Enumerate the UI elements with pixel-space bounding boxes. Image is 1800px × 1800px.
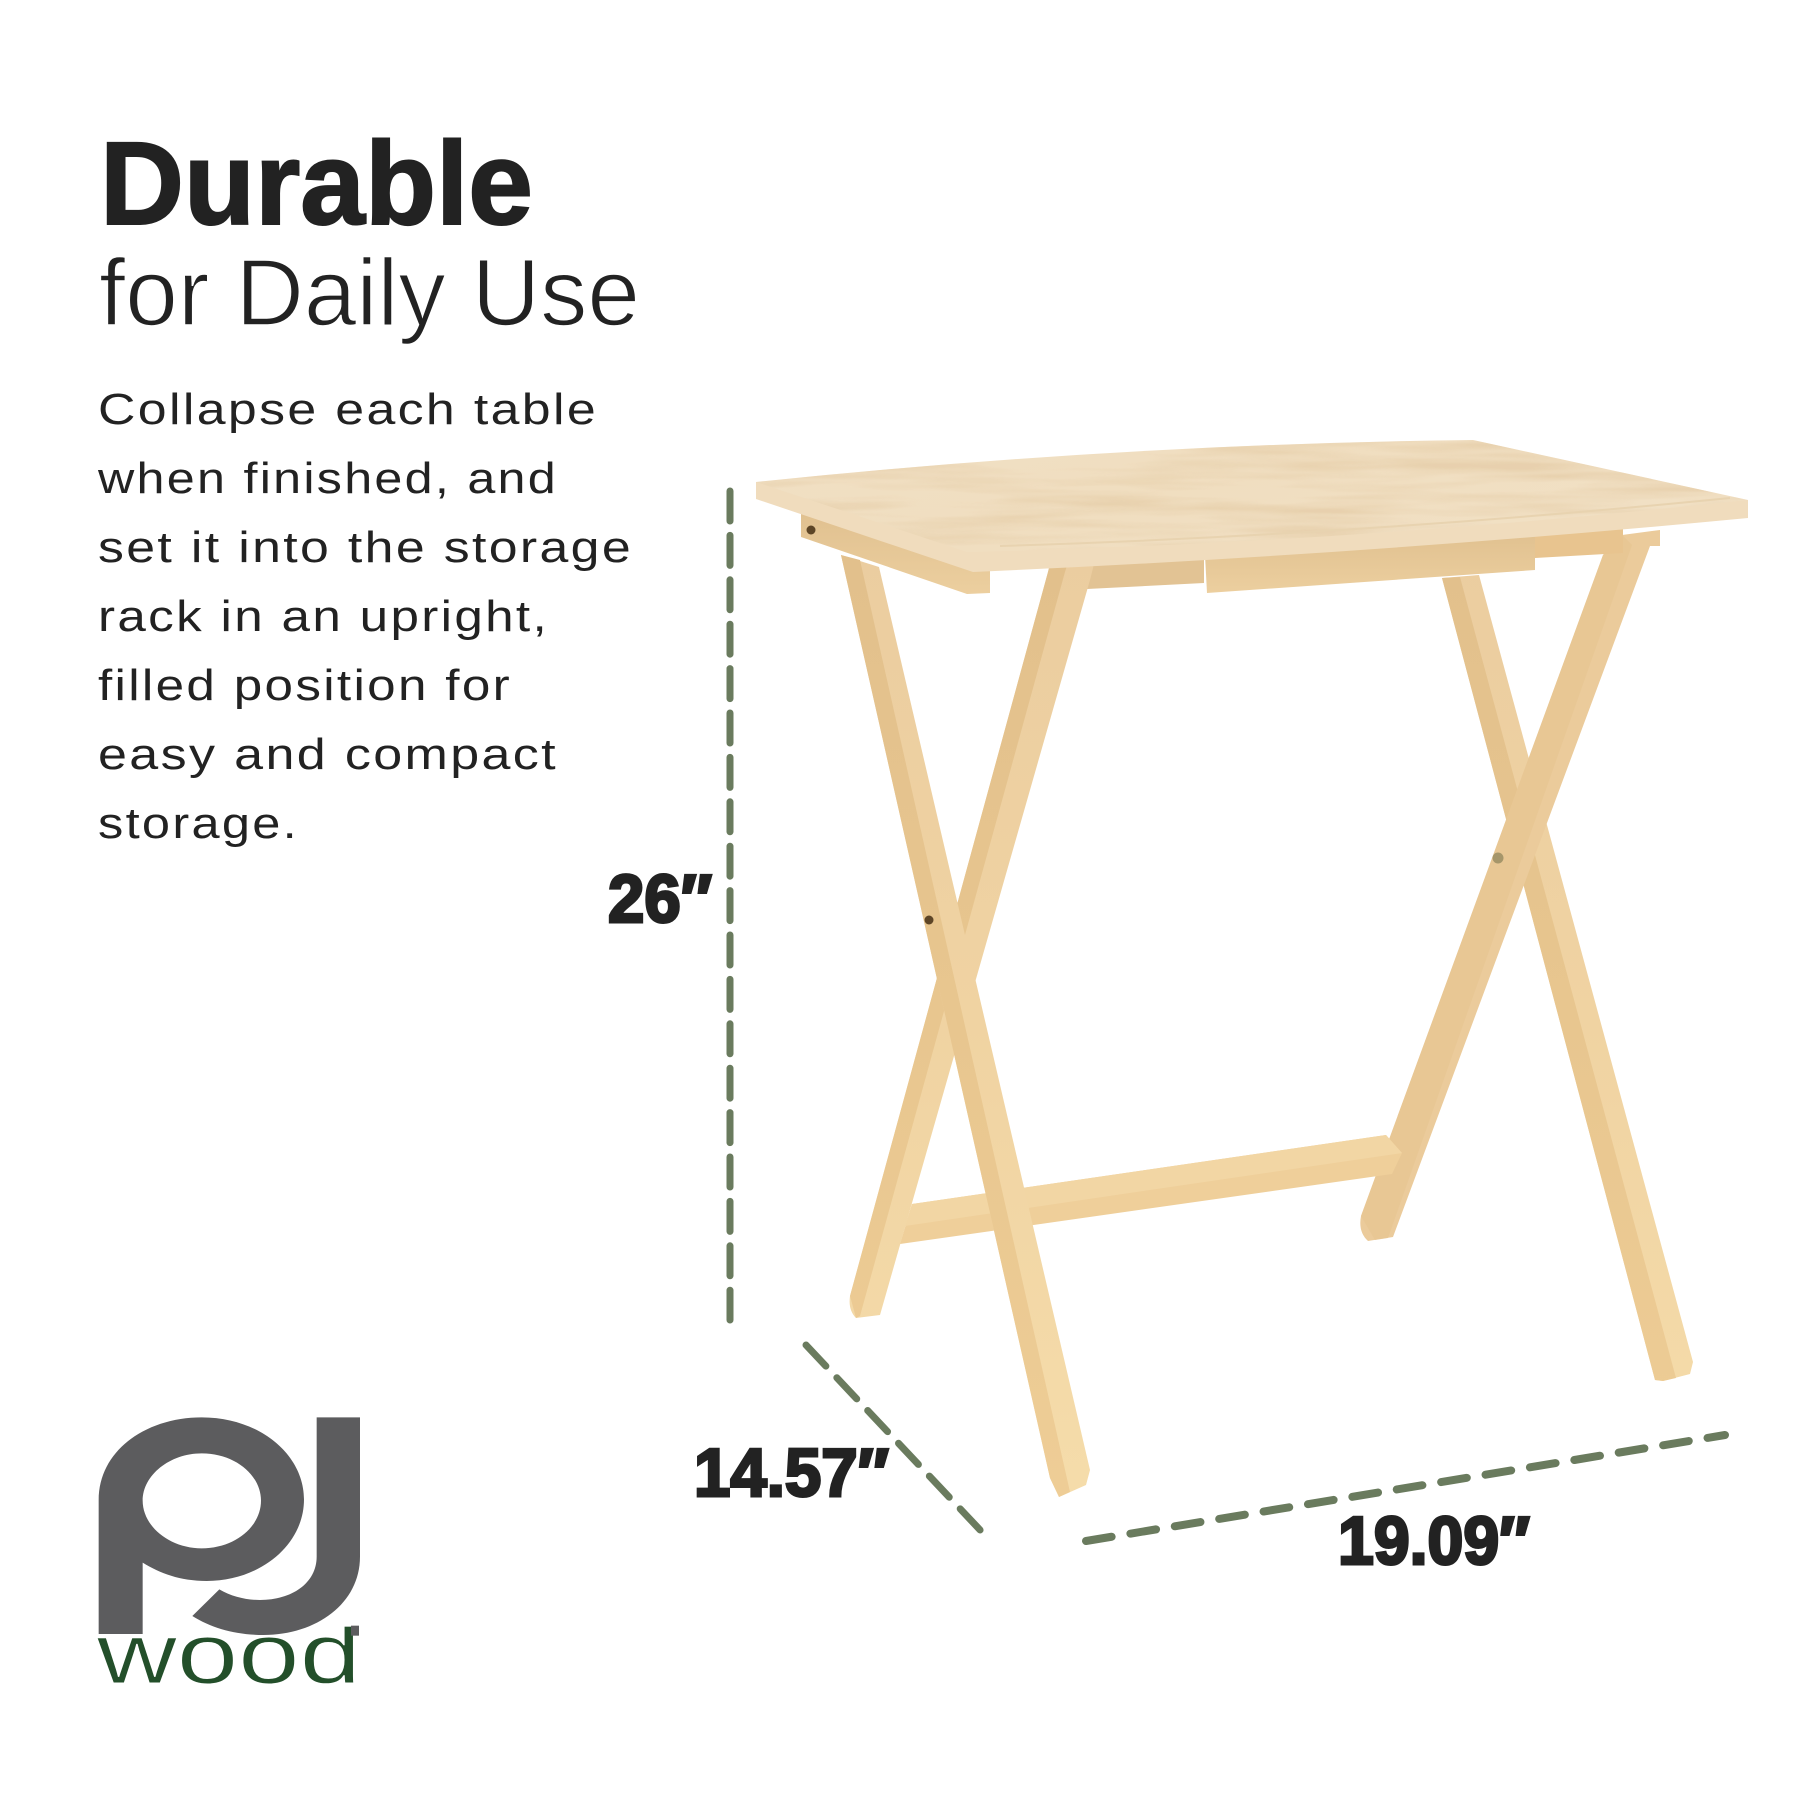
body text: set it into the storage: [98, 523, 633, 572]
front left leg: [841, 555, 1090, 1497]
back left leg: [850, 556, 1096, 1318]
cross bar: [900, 1135, 1402, 1244]
logo wordmark: wood: [96, 1607, 361, 1702]
width label: 19.09″: [1338, 1503, 1530, 1579]
back right leg: [1442, 575, 1693, 1381]
depth label: 14.57″: [694, 1435, 889, 1511]
logo mark: [99, 1417, 363, 1636]
heading light line: for Daily Use: [99, 240, 640, 346]
logo: [96, 1417, 363, 1702]
depth dimension line: [806, 1345, 982, 1532]
front right leg: [1360, 530, 1660, 1241]
tabletop grain: [756, 440, 1748, 552]
left rear rod: [1060, 548, 1204, 590]
height dimension line: [726, 491, 734, 1320]
left rail: [801, 510, 990, 594]
right rear rod: [1530, 525, 1623, 558]
body text: storage.: [98, 799, 299, 848]
body text: [97, 385, 633, 848]
body text: when finished, and: [97, 454, 558, 503]
heading bold line: Durable: [100, 118, 533, 250]
tabletop bevel line: [1000, 498, 1730, 546]
body text: easy and compact: [98, 730, 558, 779]
height label: 26″: [608, 861, 712, 937]
width dimension line: [1086, 1435, 1725, 1541]
heading: [99, 118, 640, 346]
tabletop surface: [756, 440, 1748, 552]
pivot bolts: [806, 526, 1504, 924]
center latch block: [1205, 530, 1535, 593]
body text: Collapse each table: [98, 385, 598, 434]
table illustration: [756, 440, 1748, 1497]
tabletop edge: [756, 482, 1748, 572]
body text: filled position for: [98, 661, 512, 710]
body text: rack in an upright,: [98, 592, 549, 641]
